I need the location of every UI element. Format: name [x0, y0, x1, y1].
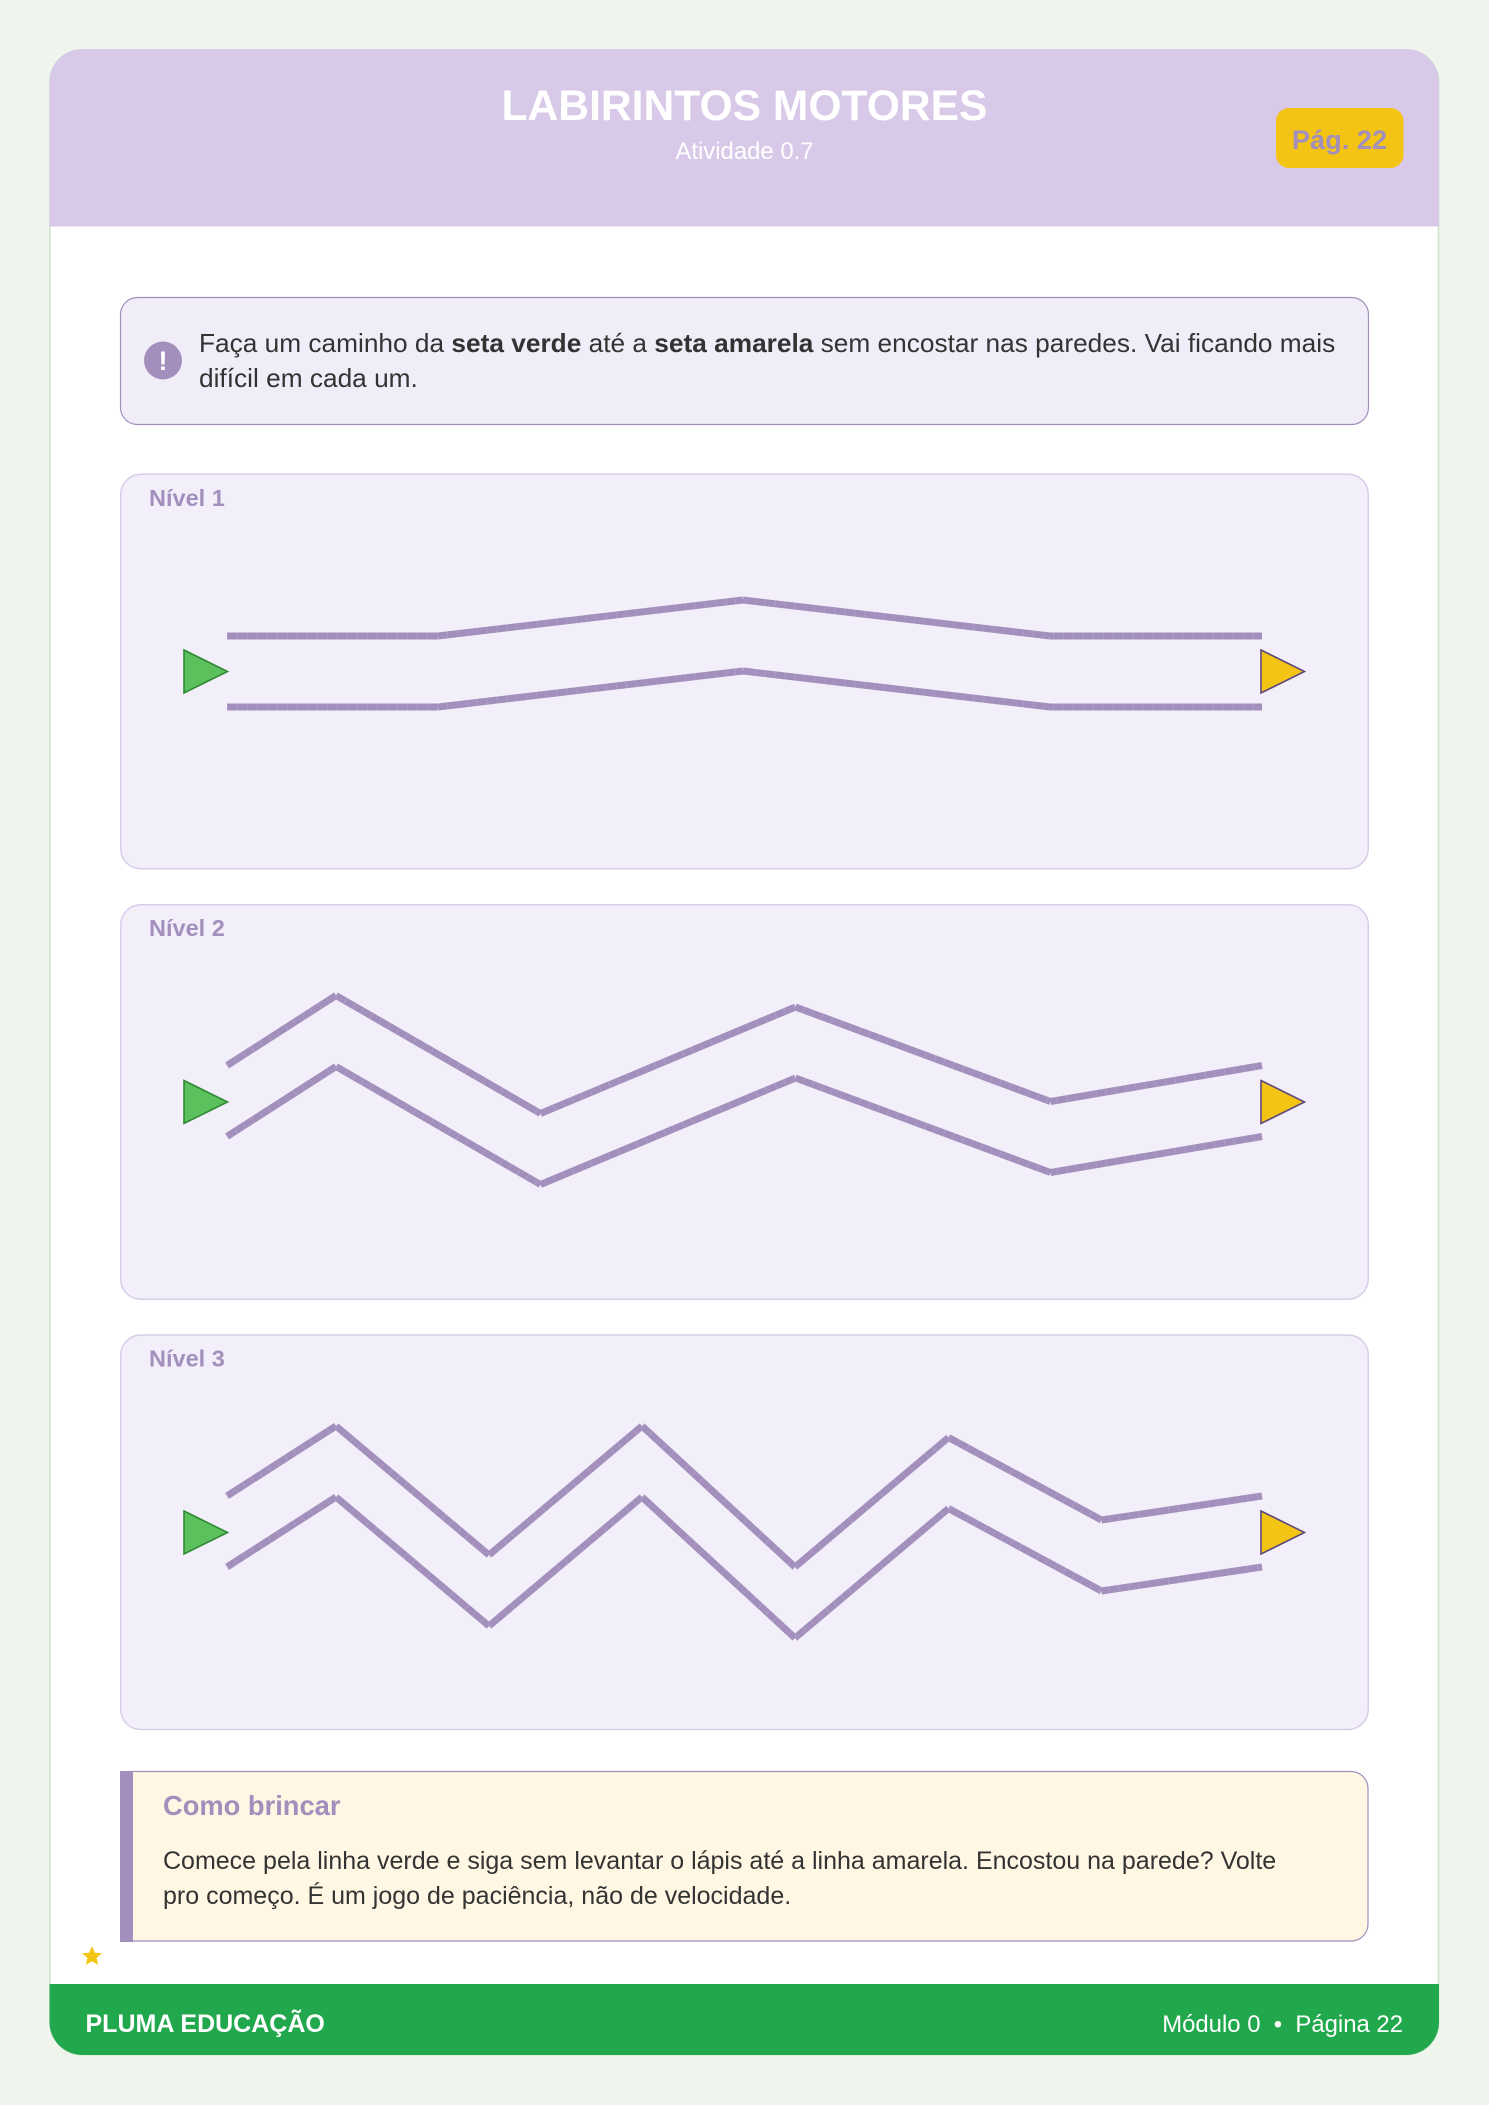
- footer brand: PLUMA EDUCAÇÃO: [86, 2008, 325, 2038]
- instruction box: [120, 298, 1368, 424]
- end arrow: yellow: [1261, 650, 1304, 693]
- callout heading: Como brincar: [163, 1790, 341, 1821]
- instruction text: difícil em cada um.: [199, 363, 418, 393]
- callout accent bar: [120, 1771, 133, 1942]
- panel: nível 1: [121, 474, 1368, 869]
- icon: star: [82, 1946, 102, 1965]
- icon: exclamation: [144, 342, 182, 380]
- heading: nível 1: Nível 1: [149, 485, 225, 511]
- footer page info: Módulo 0 • Página 22: [1162, 2011, 1403, 2038]
- callout body: Comece pela linha verde e siga sem levantar o lápis até a linha amarela. Encostou na parede? Volte: [163, 1847, 1276, 1875]
- instruction text: Faça um caminho da seta verde até a seta amarela sem encostar nas paredes. Vai ficando mais: [199, 328, 1335, 358]
- header band: [50, 49, 1439, 226]
- maze walls: nível 3: [227, 1426, 1262, 1638]
- heading: nível 3: Nível 3: [149, 1346, 225, 1372]
- subtitle: Atividade 0.7: [675, 138, 814, 165]
- callout body: pro começo. É um jogo de paciência, não de velocidade.: [163, 1881, 791, 1910]
- panel: nível 2: [121, 905, 1368, 1299]
- icon: exclamation: !: [158, 346, 168, 376]
- end arrow: yellow: [1261, 1511, 1304, 1554]
- panel: nível 3: [121, 1335, 1368, 1730]
- end arrow: yellow: [1261, 1080, 1304, 1124]
- footer band: [50, 1984, 1439, 2055]
- page badge: Pág. 22: [1292, 124, 1387, 155]
- start arrow: green: [184, 1511, 228, 1554]
- title: LABIRINTOS MOTORES: [502, 82, 987, 130]
- heading: nível 2: Nível 2: [149, 915, 225, 941]
- page badge: [1276, 108, 1404, 168]
- start arrow: green: [184, 1080, 228, 1124]
- callout: como brincar: [120, 1771, 1368, 1942]
- maze walls: nível 1: [227, 600, 1262, 707]
- start arrow: green: [184, 650, 228, 693]
- maze walls: nível 2: [227, 996, 1262, 1184]
